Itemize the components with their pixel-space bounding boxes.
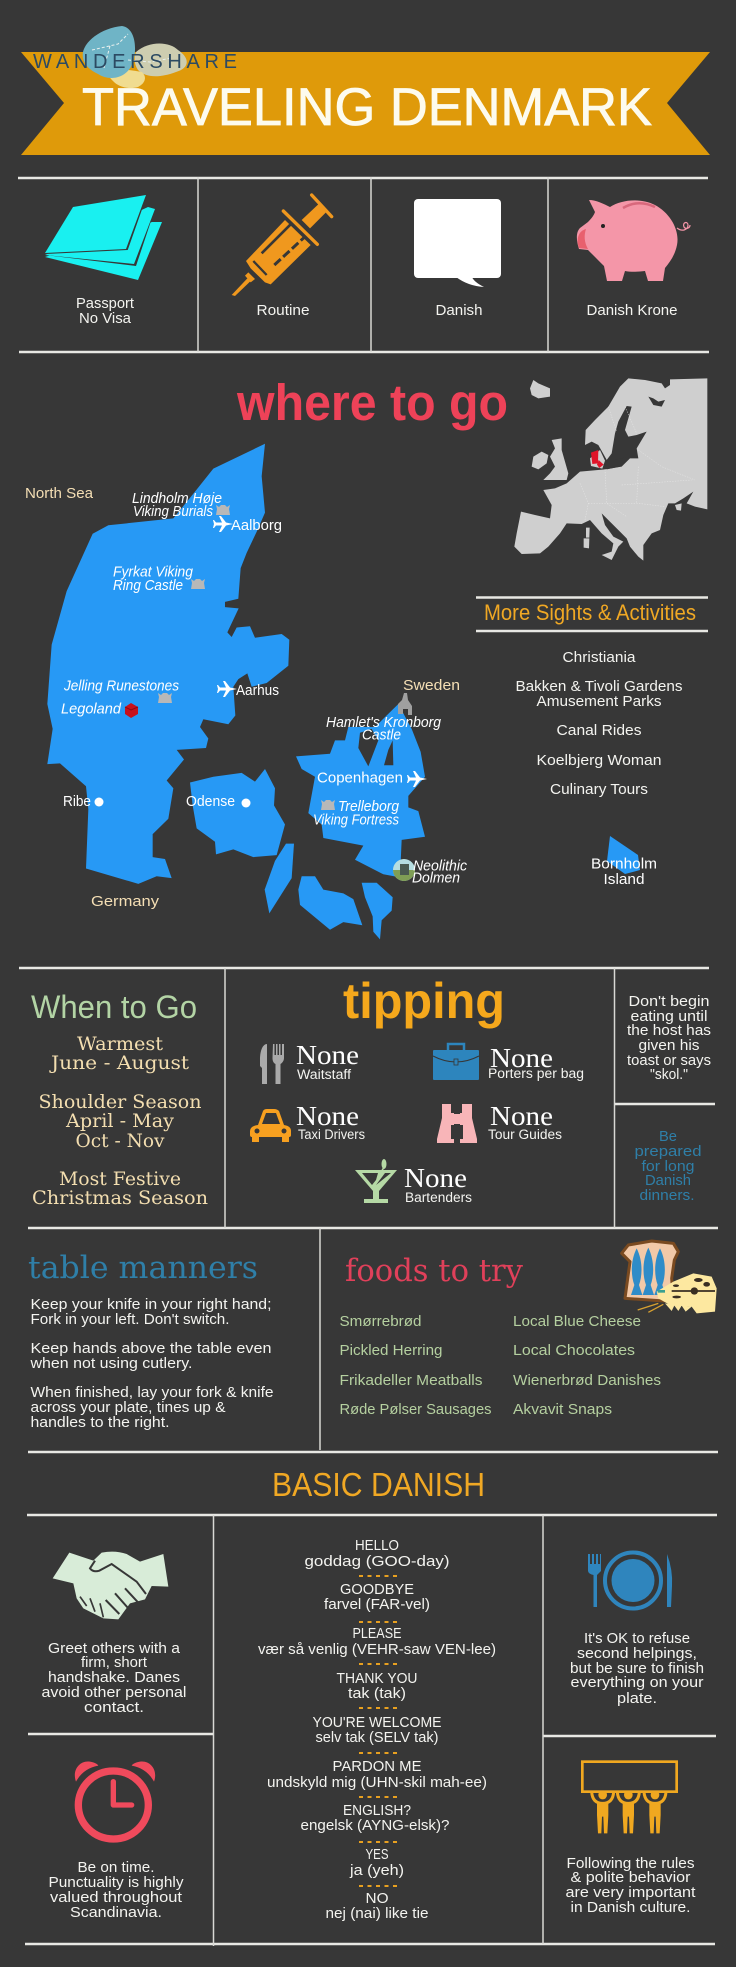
text: routine: Routine: [256, 302, 310, 319]
panel: phrases: goddag (GOO-day): [304, 1553, 450, 1570]
panel: phrases: PLEASE: [352, 1625, 402, 1642]
list: sights: Koelbjerg Woman: [536, 752, 662, 769]
text: toast tip: given his: [638, 1037, 700, 1054]
item: tour guides: Tour Guides: [488, 1127, 562, 1142]
label: Aarhus: Aarhus: [236, 682, 279, 699]
label: Sweden: Sweden: [403, 677, 460, 694]
item: tour guides: [488, 1101, 562, 1142]
icon: martini: [355, 1159, 397, 1203]
label: Jelling: Jelling Runestones: [63, 678, 179, 694]
text: handshake: handshake. Danes: [48, 1669, 180, 1686]
panel: when to go: Most Festive: [59, 1168, 181, 1190]
label: Neolithic Dolmen: Neolithic: [413, 858, 467, 874]
label: Lindholm Hoje: Viking Burials: [133, 503, 213, 520]
text: rules: & polite behavior: [570, 1869, 690, 1886]
panel: rules: [566, 1762, 696, 1916]
text: punctuality: Scandinavia.: [70, 1904, 162, 1921]
panel: phrases: ENGLISH?: [343, 1802, 411, 1819]
text: passport: Passport: [76, 295, 135, 312]
list: sights: Christiania: [562, 649, 636, 666]
panel: table manners: handles to the right.: [30, 1414, 170, 1431]
label: Lindholm Hoje: [132, 490, 230, 520]
panel: phrases: GOODBYE: [340, 1581, 414, 1598]
dividers: tipping row: [19, 968, 718, 1228]
icon: syringe: [232, 195, 332, 296]
panel: table manners: Keep your knife in your right hand;: [30, 1296, 272, 1313]
panel: phrases: ja (yeh): [349, 1862, 404, 1879]
title banner: TRAVELING DENMARK: [82, 78, 652, 137]
list: foods: Røde Pølser Sausages: [340, 1401, 492, 1418]
title banner: [21, 26, 710, 155]
panel: phrases: nej (nai) like tie: [326, 1905, 428, 1922]
panel: phrases: selv tak (SELV tak): [316, 1729, 438, 1746]
item: taxi: [296, 1101, 365, 1142]
item: taxi: None: [296, 1101, 359, 1131]
text: rules: are very important: [566, 1884, 696, 1901]
icon: sandwich and cheese: [622, 1241, 717, 1313]
text: toast tip: [627, 993, 711, 1083]
text: plate: but be sure to finish: [570, 1660, 704, 1677]
panel: when to go: Christmas Season: [32, 1187, 208, 1209]
icon: handshake: [53, 1552, 168, 1619]
panel: plate: [570, 1552, 704, 1707]
panel: when to go: [31, 989, 208, 1209]
heading: where to go: where to go: [236, 374, 508, 431]
label: Fyrkat: Ring Castle: [113, 577, 183, 594]
panel: phrases: undskyld mig (UHN-skil mah-ee): [267, 1774, 487, 1791]
icon: piggy bank: [577, 200, 690, 281]
map: Bornholm: [591, 836, 657, 888]
panel: handshake: [42, 1552, 186, 1716]
text: toast tip: the host has: [627, 1022, 711, 1039]
label: Aalborg: [213, 516, 282, 534]
panel: phrases: engelsk (AYNG-elsk)?: [300, 1817, 450, 1834]
label: Trelleborg: Trelleborg: [338, 798, 400, 815]
icon: binoculars: [437, 1104, 477, 1143]
list: foods: Frikadeller Meatballs: [340, 1372, 482, 1389]
label: Neolithic Dolmen: [412, 858, 467, 886]
map: Europe: [514, 378, 707, 561]
label: Jelling: [63, 678, 179, 703]
text: punctuality: valued throughout: [50, 1889, 183, 1906]
icon: Kronborg castle: [398, 693, 412, 715]
text: long dinners: Danish: [645, 1172, 691, 1189]
text: plate: everything on your: [570, 1674, 704, 1691]
text: handshake: avoid other personal: [42, 1684, 186, 1701]
panel: table manners: across your plate, tines up &: [30, 1399, 226, 1416]
panel: table manners: When finished, lay your fork & knife: [30, 1384, 274, 1401]
panel: when to go: When to Go: [31, 989, 197, 1025]
icon: car: [250, 1109, 291, 1142]
panel: when to go: Oct - Nov: [76, 1130, 165, 1152]
label: Legoland: Legoland: [61, 700, 122, 718]
text: punctuality: Be on time.: [78, 1859, 154, 1876]
text: rules: in Danish culture.: [570, 1899, 690, 1916]
text: toast tip: toast or says: [627, 1052, 711, 1069]
item: taxi: Taxi Drivers: [298, 1127, 365, 1142]
label: Trelleborg: Viking Fortress: [313, 812, 399, 828]
item: bartenders: Bartenders: [405, 1190, 472, 1205]
text: handshake: firm, short: [81, 1654, 148, 1671]
panel: phrases: [258, 1537, 496, 1922]
logo: Wandershare: [33, 26, 237, 88]
panel: when to go: Shoulder Season: [38, 1091, 202, 1113]
text: toast tip: "skol.": [650, 1066, 688, 1083]
list: foods: [340, 1313, 661, 1418]
item: tour guides: None: [490, 1101, 553, 1131]
dividers: basic danish: [25, 1515, 717, 1944]
panel: phrases: PARDON ME: [332, 1758, 422, 1775]
panel: when to go: Warmest: [77, 1033, 163, 1055]
item: bartenders: None: [404, 1163, 467, 1193]
label: Aalborg: Aalborg: [231, 517, 282, 534]
panel: phrases: vær så venlig (VEHR-saw VEN-lee): [258, 1641, 496, 1658]
list: sights: Culinary Tours: [550, 781, 648, 798]
text: passport: [76, 295, 135, 327]
list: sights: Bakken & Tivoli Gardens: [516, 678, 682, 695]
text: long dinners: Be: [659, 1128, 677, 1145]
label: Neolithic Dolmen: Dolmen: [412, 870, 460, 886]
text: handshake: Greet others with a: [48, 1640, 181, 1657]
text: passport: No Visa: [79, 310, 132, 327]
label: Copenhagen: Copenhagen: [317, 770, 403, 786]
label: Germany: Germany: [91, 893, 160, 910]
text: plate: [570, 1630, 704, 1707]
panel: foods to try: foods to try: [345, 1253, 523, 1289]
text: plate: It's OK to refuse: [584, 1630, 690, 1647]
icon: alarm clock: [75, 1761, 155, 1839]
label: North Sea: North Sea: [25, 485, 94, 502]
icon: people holding sign: [582, 1762, 677, 1833]
list: foods: Smørrebrød: [340, 1313, 422, 1330]
icon: briefcase: [433, 1044, 479, 1080]
item: bartenders: [404, 1163, 472, 1205]
text: danish krone: Danish Krone: [586, 302, 678, 319]
label: Fyrkat: [113, 564, 205, 594]
list: foods: Wienerbrød Danishes: [513, 1372, 661, 1389]
panel: table manners: [28, 1250, 274, 1431]
list: foods: Akvavit Snaps: [513, 1401, 612, 1418]
text: toast tip: eating until: [630, 1008, 708, 1025]
panel: table manners: table manners: [28, 1250, 258, 1286]
list: foods: Local Blue Cheese: [513, 1313, 641, 1330]
panel: foods to try: [340, 1241, 717, 1418]
label: Trelleborg: [313, 798, 400, 828]
panel: phrases: YES: [366, 1846, 388, 1863]
map: Denmark: [25, 444, 467, 939]
text: danish: Danish: [436, 302, 482, 319]
panel: table manners: when not using cutlery.: [29, 1355, 192, 1372]
panel: phrases: THANK YOU: [336, 1670, 418, 1687]
map: Bornholm: Island: [604, 871, 644, 888]
map: Bornholm: Bornholm: [591, 856, 657, 872]
label: Odense: Odense: [186, 793, 235, 810]
item: waitstaff: None: [296, 1040, 359, 1070]
label: Aarhus: [217, 681, 279, 699]
text: long dinners: [634, 1128, 702, 1204]
list: sights: [516, 649, 682, 798]
panel: when to go: April - May: [65, 1110, 174, 1132]
list: sights: Amusement Parks: [536, 693, 662, 710]
panel: when to go: June - August: [49, 1052, 189, 1074]
text: handshake: contact.: [84, 1699, 144, 1716]
panel: phrases: NO: [366, 1890, 388, 1907]
label: Kronborg: Hamlet's Kronborg: [326, 714, 442, 731]
text: rules: Following the rules: [566, 1855, 694, 1872]
panel: phrases: HELLO: [355, 1537, 399, 1554]
list: foods: Local Chocolates: [513, 1342, 635, 1359]
list: sights: Canal Rides: [556, 722, 642, 739]
text: punctuality: [48, 1859, 184, 1921]
text: toast tip: Don't begin: [628, 993, 710, 1010]
label: Kronborg: Castle: [362, 726, 401, 744]
panel: punctuality: [48, 1761, 184, 1921]
logo: Wandershare: WANDERSHARE: [33, 51, 237, 73]
panel: essentials: [18, 177, 709, 352]
list: foods: Pickled Herring: [340, 1342, 442, 1359]
text: long dinners: prepared: [634, 1143, 702, 1160]
text: punctuality: Punctuality is highly: [48, 1874, 184, 1891]
panel: phrases: farvel (FAR-vel): [324, 1596, 430, 1613]
panel: phrases: tak (tak): [348, 1685, 406, 1702]
dividers: manners row: [28, 1451, 718, 1453]
label: Kronborg: [326, 714, 442, 744]
text: handshake: [42, 1640, 186, 1716]
text: plate: plate.: [617, 1690, 657, 1707]
icon: dolmen: [393, 859, 415, 881]
panel: phrases: YOU'RE WELCOME: [312, 1714, 442, 1731]
panel: table manners: Keep hands above the table even: [30, 1340, 272, 1357]
heading: basic danish: BASIC DANISH: [272, 1466, 485, 1503]
panel: table manners: Fork in your left. Don't switch.: [30, 1311, 230, 1328]
text: rules: [566, 1855, 696, 1916]
item: porters: None: [490, 1043, 553, 1073]
label: Ribe: Ribe: [63, 793, 91, 810]
icon: plate and cutlery: [588, 1552, 672, 1608]
item: porters: [488, 1043, 584, 1081]
item: waitstaff: Waitstaff: [297, 1067, 351, 1082]
item: porters: Porters per bag: [488, 1066, 584, 1081]
icon: passport: [45, 195, 162, 280]
text: long dinners: for long: [642, 1158, 694, 1175]
label: Lindholm Hoje: Lindholm Høje: [132, 490, 222, 507]
heading: tipping: tipping: [343, 973, 505, 1029]
icon: speech bubble: [414, 199, 501, 287]
panel: more sights: [476, 598, 708, 798]
text: long dinners: dinners.: [640, 1187, 694, 1204]
panel: tipping: [250, 973, 584, 1205]
icon: fork and knife: [260, 1044, 284, 1084]
item: waitstaff: [296, 1040, 359, 1082]
text: plate: second helpings,: [577, 1645, 697, 1662]
heading: more sights: More Sights & Activities: [484, 600, 696, 625]
label: Fyrkat: Fyrkat Viking: [113, 564, 194, 580]
